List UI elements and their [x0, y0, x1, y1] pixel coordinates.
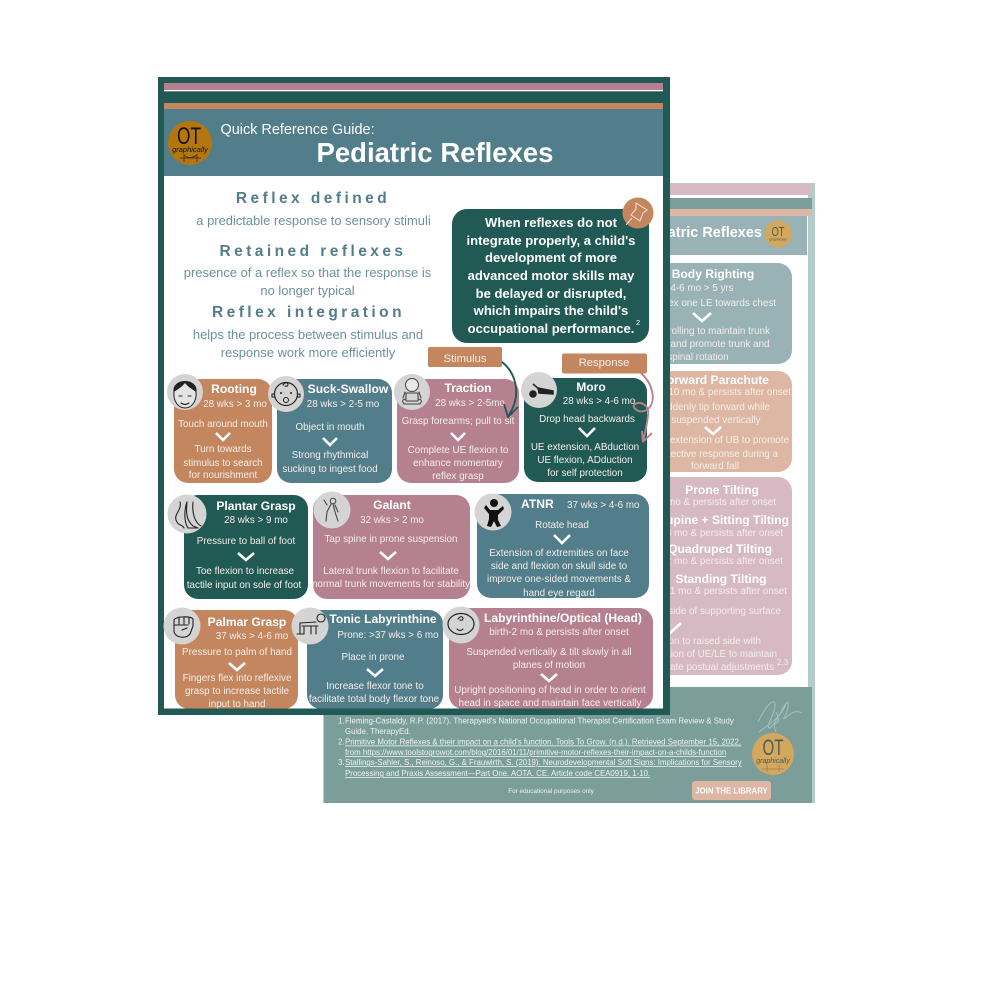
callout: occupational performance: development of more — [485, 250, 617, 265]
card: Plantar Grasp: Plantar Grasp — [216, 499, 296, 513]
card: Body Righting: Body Righting — [672, 267, 754, 281]
arrow: stimulus to Traction — [502, 362, 518, 417]
card: ATNR: Rotate head — [535, 520, 589, 531]
card: ATNR: side and flexion on skull side to — [491, 561, 628, 572]
icon: crawling baby — [292, 608, 328, 644]
card: Labyrinthine/Optical (Head): planes of motion — [513, 660, 585, 671]
text: retained reflexes: presence of a reflex so that the response is — [184, 265, 431, 280]
text: reflex integration: helps the process between stimulus and — [193, 327, 423, 342]
card: Tilting reactions: 2,3 — [777, 658, 789, 667]
card: ATNR: hand eye regard — [523, 588, 595, 599]
card: ATNR: improve one-sided movements & — [487, 574, 631, 585]
row three clipped to page — [175, 608, 653, 710]
card: Traction: Grasp forearms; pull to sit — [402, 416, 515, 427]
button: join the library: JOIN THE LIBRARY — [695, 786, 769, 796]
back page logo: OT — [772, 224, 785, 239]
card: Palmar Grasp: Pressure to palm of hand — [182, 647, 292, 658]
card: Rooting: 28 wks > 3 mo — [203, 399, 267, 410]
card: Rooting: Touch around mouth — [178, 419, 268, 430]
card: Traction — [394, 374, 519, 483]
disclaimer: For educational purposes only — [508, 788, 595, 795]
callout: occupational performance: advanced motor skills may — [468, 268, 635, 283]
label: response — [562, 354, 647, 374]
label: stimulus — [428, 347, 502, 367]
card: Plantar Grasp: tactile input on sole of foot — [187, 580, 301, 591]
card: Forward Parachute: suspended vertically — [671, 415, 761, 426]
icon: baby with pacifier — [268, 376, 304, 412]
card: Moro: UE flexion, ADduction — [537, 455, 633, 466]
callout: occupational performance: 2 — [636, 318, 640, 327]
card: Rooting: Rooting — [211, 382, 257, 396]
card: Tilting reactions: Supine + Sitting Tilting — [658, 513, 789, 527]
card: Forward Parachute: with extension of UB to promote — [648, 435, 790, 446]
card: Tilting reactions: flexion to raised side with — [651, 636, 761, 647]
card: Tonic Labyrinthine: Place in prone — [342, 652, 405, 663]
card: Moro: UE extension, ABduction — [531, 442, 639, 453]
card: Traction: 28 wks > 2-5mo — [435, 398, 505, 409]
card: Tilting reactions: Prone Tilting — [685, 483, 759, 497]
card: Traction: enhance momentary — [413, 458, 503, 469]
references list — [338, 716, 742, 778]
card: Moro: for self protection — [547, 468, 623, 479]
card: Rooting: for nourishment — [189, 470, 257, 481]
card: Suck-Swallow: Object in mouth — [296, 422, 364, 433]
card: Labyrinthine/Optical (Head): head in space and maintain face vertically — [459, 698, 641, 709]
definitions — [184, 190, 431, 360]
card: ATNR: ATNR — [521, 497, 554, 511]
panel: back page — [323, 183, 815, 803]
card: Traction: Complete UE flexion to — [408, 445, 509, 456]
card: Plantar Grasp: 28 wks > 9 mo — [224, 515, 288, 526]
card: Tonic Labyrinthine: facilitate total body flexor tone — [309, 694, 440, 705]
card: Tilting reactions: Standing Tilting — [675, 572, 767, 586]
card: Palmar Grasp: Fingers flex into reflexive — [183, 673, 292, 684]
text: reflex integration: response work more efficiently — [221, 345, 396, 360]
footer logo — [752, 733, 794, 775]
card: Labyrinthine/Optical (Head): Upright positioning of head in order to orient — [454, 685, 646, 696]
card: Tilting reactions: side of supporting surface — [668, 606, 782, 617]
card: Body Righting: 4-6 mo > 5 yrs — [670, 283, 734, 294]
callout: occupational performance: When reflexes do not — [485, 215, 618, 230]
card: Moro: Moro — [576, 380, 606, 394]
card: Tilting reactions: mo & persists after onset — [667, 497, 776, 508]
card: Tilting reactions — [600, 477, 792, 675]
icon: tilted baby head — [442, 606, 480, 644]
card: Plantar Grasp: Pressure to ball of foot — [197, 536, 296, 547]
card: Rooting: Turn towards — [194, 444, 252, 455]
callout: occupational performance: be delayed or disrupted, — [476, 286, 626, 301]
icon: bending figure — [314, 492, 350, 528]
card: Tonic Labyrinthine: Prone: >37 wks > 6 mo — [337, 630, 439, 641]
card: Forward Parachute: protective response during a — [654, 449, 779, 460]
card: Body Righting: flex one LE towards chest — [663, 298, 776, 309]
card: Rooting — [167, 374, 272, 483]
icon: face — [167, 374, 203, 410]
card: Forward Parachute: Forward Parachute — [659, 373, 769, 387]
card: Body Righting: spinal rotation — [667, 352, 729, 363]
card: Body Righting: and promote trunk and — [670, 339, 770, 350]
card: Body Righting — [600, 263, 792, 364]
icon: baby silhouette — [474, 494, 512, 530]
card: Labyrinthine/Optical (Head) — [449, 608, 653, 709]
card: Labyrinthine/Optical (Head): birth-2 mo & persists after onset — [489, 627, 629, 638]
card: Galant — [312, 492, 470, 599]
back page title: Pediatric Reflexes — [637, 225, 762, 241]
card: Forward Parachute: Suddenly tip forward while — [655, 402, 771, 413]
title: Pediatric Reflexes — [317, 137, 553, 168]
card: Forward Parachute: 9-10 mo & persists after onset — [660, 387, 791, 398]
card: Tilting reactions: facilitate postual adjustments — [648, 662, 774, 673]
card: Palmar Grasp: Palmar Grasp — [208, 615, 286, 629]
logo: graphically — [172, 145, 209, 154]
text: retained reflexes — [184, 265, 431, 298]
card: Labyrinthine/Optical (Head): Suspended vertically & tilt slowly in all — [466, 647, 632, 658]
subtitle: Quick Reference Guide: — [220, 122, 375, 138]
card: Galant: Tap spine in prone suspension — [325, 534, 457, 545]
signature scribble — [758, 702, 802, 732]
card: Forward Parachute: forward fall — [691, 461, 739, 472]
card: Galant: 32 wks > 2 mo — [360, 515, 424, 526]
heading: reflex integration: Reflex integration — [212, 304, 405, 321]
callout: occupational performance: integrate properly, a child's — [467, 233, 635, 248]
card: Suck-Swallow: Suck-Swallow — [308, 382, 389, 396]
icon: fist — [164, 608, 200, 644]
card: Tilting reactions: Quadruped Tilting — [668, 542, 772, 556]
card: Palmar Grasp: 37 wks > 4-6 mo — [216, 631, 289, 642]
card: Traction: Traction — [444, 381, 492, 395]
card: Suck-Swallow: Strong rhythmical — [292, 450, 368, 461]
card: Tonic Labyrinthine — [307, 610, 443, 709]
label: response: Response — [579, 357, 629, 369]
card: Suck-Swallow: 28 wks > 2-5 mo — [307, 399, 380, 410]
card: Suck-Swallow: sucking to ingest food — [282, 464, 378, 475]
card: Tilting reactions: 21 mo & persists after onset — [664, 586, 787, 597]
card: Tilting reactions: 12 mo & persists after onset — [660, 556, 783, 567]
footer logo: OT — [762, 735, 784, 760]
card: ATNR — [474, 494, 649, 599]
logo — [168, 121, 212, 165]
card: Suck-Swallow — [268, 376, 392, 483]
card: Tilting reactions: 7-8 mo & persists after onset — [657, 528, 783, 539]
icon: feet — [168, 494, 206, 534]
references list: Guide. TherapyEd. — [345, 727, 411, 736]
heading: retained reflexes: Retained reflexes — [219, 243, 407, 260]
card: Body Righting: rolling to maintain trunk — [668, 326, 770, 337]
card: Tonic Labyrinthine: Increase flexor tone to — [326, 681, 424, 692]
card: ATNR: Extension of extremities on face — [489, 548, 629, 559]
references list: 2. — [338, 738, 345, 746]
footer logo: graphically — [756, 758, 790, 765]
card: Palmar Grasp: input to hand — [209, 699, 265, 710]
card: Palmar Grasp: grasp to increase tactile — [185, 686, 290, 697]
callout: occupational performance: which impairs the child's — [473, 303, 628, 318]
card: Moro — [521, 372, 647, 482]
panel: front page — [158, 77, 670, 715]
icon: infant lying — [521, 372, 557, 408]
card: Galant: Lateral trunk flexion to facilitate — [323, 566, 459, 577]
card: Tonic Labyrinthine: Tonic Labyrinthine — [329, 612, 437, 626]
back page logo — [764, 220, 792, 248]
logo: OT — [177, 123, 201, 150]
card: Plantar Grasp — [168, 494, 308, 599]
references list: 1. — [338, 716, 345, 726]
back page logo: graphically — [769, 238, 787, 242]
references list: Stallings-Sahler, S., Reinoso, G., & Frauwirth, S. (2019). Neurodevelopmental Soft Signs: Implications for Sensory — [345, 758, 742, 767]
text: reflex integration — [193, 327, 423, 360]
references list: 3. — [338, 758, 345, 767]
card: Galant: Galant — [373, 498, 411, 512]
card: Rooting: stimulus to search — [183, 458, 263, 469]
label: stimulus: Stimulus — [444, 353, 487, 365]
header band — [164, 109, 663, 176]
callout: occupational performance: occupational performance. — [468, 321, 634, 336]
icon: seated baby — [394, 374, 430, 410]
card: Forward Parachute — [600, 371, 792, 472]
references list: Primitive Motor Reflexes & their impact on a child's function. Tools To Grow. (n.d.). Retrieved September 15, 2022, — [345, 738, 741, 746]
card: Palmar Grasp — [175, 610, 298, 710]
icon: push pin — [622, 198, 654, 228]
text: reflex defined: a predictable response to sensory stimuli — [196, 213, 431, 228]
card: Plantar Grasp: Toe flexion to increase — [196, 566, 294, 577]
references list: Processing and Praxis Assessment—Part One. AOTA. CE. Article code CEA0919, 1-10. — [345, 769, 650, 778]
arrow: response to Moro — [634, 373, 653, 442]
card: Tilting reactions: extension of UE/LE to maintain — [642, 649, 777, 660]
card: Galant: normal trunk movements for stability — [312, 579, 470, 590]
card: Traction: reflex grasp — [432, 471, 484, 482]
card: Moro: Drop head backwards — [539, 414, 635, 425]
button: join the library — [692, 781, 771, 800]
callout: occupational performance — [452, 198, 654, 343]
card: ATNR: 37 wks > 4-6 mo — [567, 500, 640, 511]
card: Moro: 28 wks > 4-6 mo — [563, 396, 636, 407]
references list: from https://www.toolstogrowot.com/blog/2016/01/11/primitive-motor-reflexes-their-impact-on-a-childs-function — [345, 748, 726, 757]
card: Labyrinthine/Optical (Head): Labyrinthine/Optical (Head) — [484, 611, 642, 625]
text: retained reflexes: no longer typical — [260, 283, 355, 298]
heading: reflex defined: Reflex defined — [236, 190, 390, 207]
panel: references footer — [324, 687, 812, 803]
references list: Fleming-Castaldy, R.P. (2017). Therapyed's National Occupational Therapist Certification Exam Review & Study — [345, 716, 734, 726]
